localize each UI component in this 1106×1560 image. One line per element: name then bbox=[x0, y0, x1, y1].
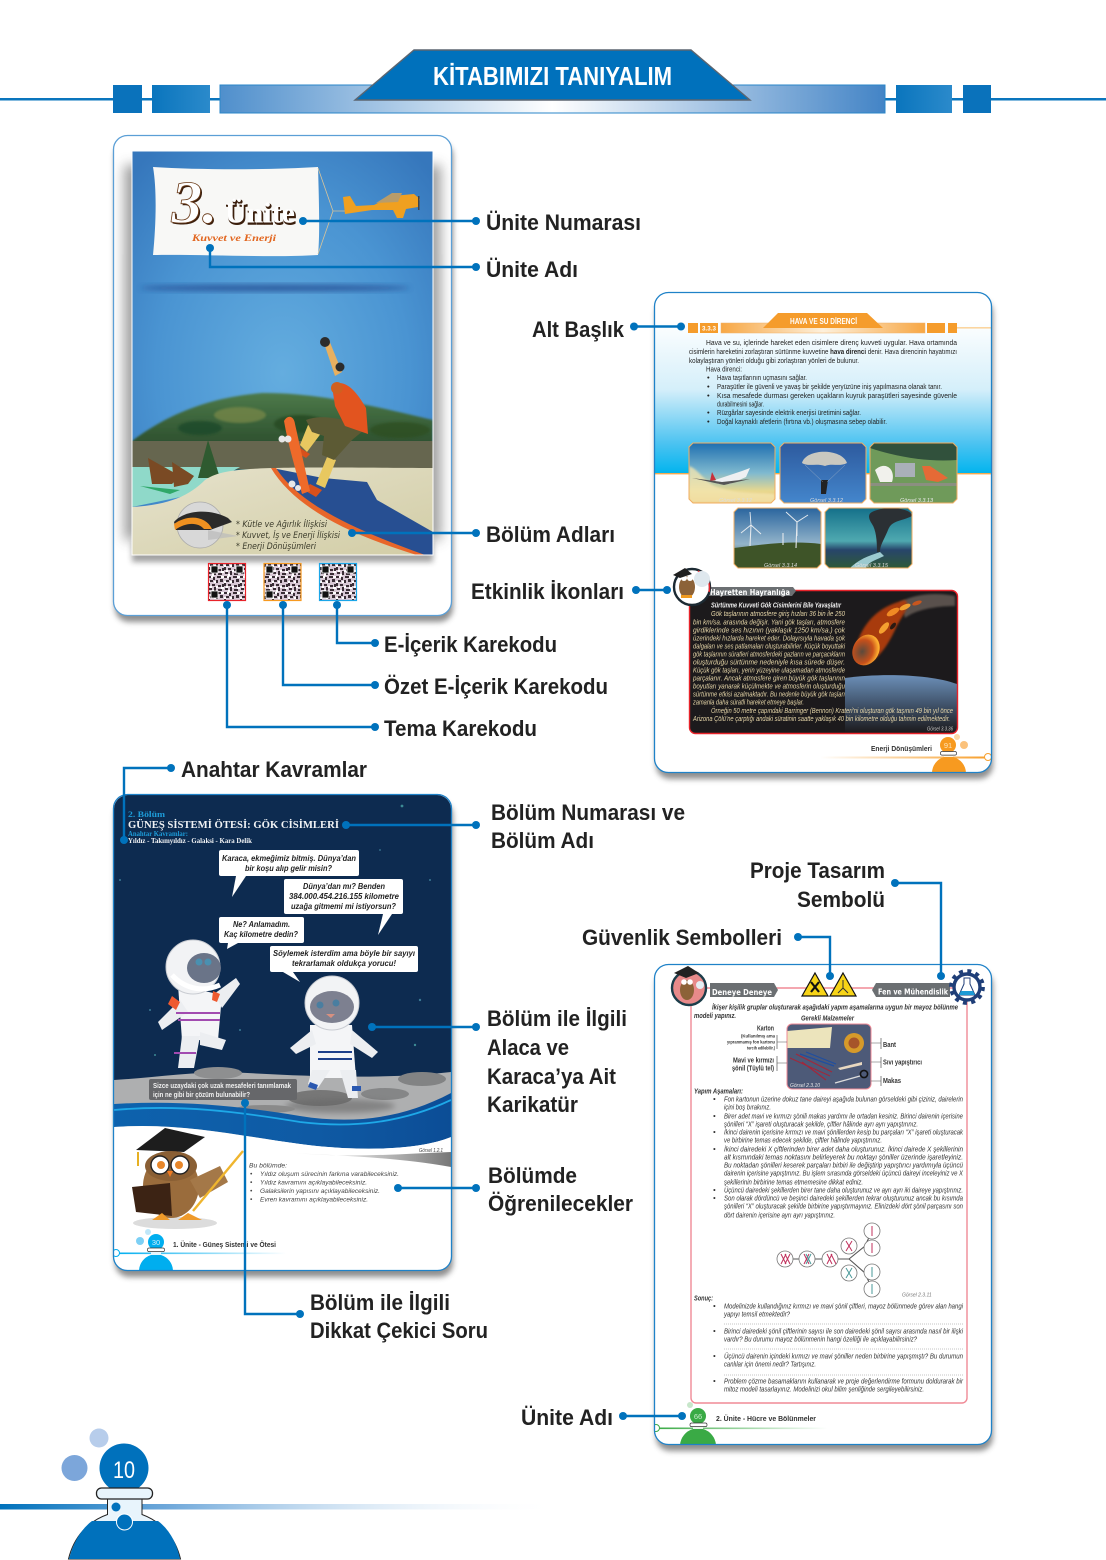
learning outcomes: • bbox=[250, 1180, 253, 1186]
label: Alt Başlık: Alt Başlık bbox=[532, 317, 625, 342]
build steps: Üçüncü dairedeki şekillerden birer tane daha oluşturunuz ve ayrı ayrı iki daireye yapıştırınız. bbox=[724, 1186, 963, 1194]
build steps: içini boş bırakınız. bbox=[724, 1102, 771, 1112]
speech bubble: first line: Karaca, ekmeğimiz bitmiş. Dünya’dan bbox=[222, 854, 356, 863]
build steps: Yapım Aşamaları: bbox=[694, 1086, 743, 1096]
activity box: dark meteor panel: parçalanır. Ancak atmosfere giren büyük gök taşlarının bbox=[692, 673, 845, 682]
build steps: • bbox=[713, 1128, 716, 1136]
footer: unit name and page number bbox=[112, 1229, 286, 1271]
label: Ünite Adı alt: Ünite Adı bbox=[521, 1405, 613, 1430]
connector: Etkinlik İkonları bbox=[632, 586, 671, 594]
chapter heading: 2. Bölüm bbox=[128, 810, 165, 819]
connector: Güvenlik Sembolleri bbox=[794, 933, 834, 980]
activity box: dark meteor panel: Örneğin 50 metre çapındaki Barringer (Bennon) Krateri’ni oluşturan gök taşının 49 bin yıl önce bbox=[711, 706, 953, 715]
label: Bölüm ile İlgili Dikkat Çekici Soru bbox=[310, 1290, 488, 1343]
banner bbox=[153, 167, 350, 256]
label: Bölüm ile İlgili Alaca ve Karaca'ya Ait Karikatür: Karikatür bbox=[487, 1092, 578, 1117]
label: E-İçerik Karekodu: E-İçerik Karekodu bbox=[384, 632, 557, 657]
chapter heading: GÜNEŞ SİSTEMİ ÖTESİ: GÖK CİSİMLERİ bbox=[128, 818, 339, 831]
question box: için ne gibi bir çözüm bulunabilir? bbox=[153, 1090, 250, 1099]
activity box: dark meteor panel: oluşturduğu sürtünme nedeniyle kısa sürede düşer. bbox=[693, 657, 845, 666]
icon: owl badge bbox=[672, 966, 706, 1005]
panel: chapter opener page bbox=[112, 794, 453, 1277]
conclusion questions: canlılar için önemi nedir? Tartışınız. bbox=[724, 1360, 816, 1368]
chapter heading bbox=[128, 810, 339, 845]
activity box: dark meteor panel: bin km/sa. arasında değişir. Yani gök taşları, atmosfere bbox=[693, 617, 845, 626]
label: Etkinlik İkonları: Etkinlik İkonları bbox=[471, 579, 624, 604]
body text: Hava ve su, içlerinde hareket eden cisimlere direnç kuvveti uygular. Hava ortamında bbox=[706, 338, 958, 347]
conclusion questions: Problem çözme basamaklarını kullanarak ve proje değerlendirme formunu doldurarak bir bbox=[724, 1376, 963, 1386]
activity box: dark meteor panel: Arizona Çölü’ne çarptığı andaki süratinin saatte yaklaşık 40 bin kilometre olduğu tahmin edilmektedir. bbox=[692, 714, 950, 723]
build steps: dairenin içerisine yapıştırınız. Bu işlem sırasında görseldeki üçüncü daireyi inceleyiniz ve X bbox=[724, 1168, 964, 1178]
build steps: İkinci dairedeki X çiftlerinden birer adet daha oluşturunuz. İkinci dairede X şekillerinin bbox=[724, 1144, 963, 1154]
label: Bölüm ile İlgili Alaca ve Karaca'ya Ait Karikatür: Karaca’ya Ait bbox=[487, 1064, 617, 1089]
blue wave bbox=[114, 1093, 451, 1149]
conclusion questions: Modelinizde kullandığınız kırmızı ve mavi şönil çiftleri, mayoz bölünmede görev alan hangi bbox=[724, 1302, 963, 1310]
activity box: dark meteor panel: Görsel 3.3.36 bbox=[927, 726, 953, 732]
speech bubble: third line bbox=[219, 917, 304, 949]
qr code: summary bbox=[264, 564, 301, 600]
label: Ünite Adı: Ünite Adı bbox=[486, 257, 578, 282]
build steps: Son olarak dördüncü ve beşinci dairedeki şekillerden tekrar oluşturunuz ancak bu kısımda bbox=[724, 1194, 963, 1202]
activity box: dark meteor panel: boyutları yanarak küçülmekte ve atmosferin oluşturduğu bbox=[693, 681, 846, 690]
conclusion questions: mitoz modeli tasarlayınız. Modelinizi okul bilim şenliğinde sergileyebilirsiniz. bbox=[724, 1384, 924, 1394]
conclusion questions: Sonuç: bbox=[694, 1294, 713, 1302]
body text: Rüzgârlar sayesinde elektrik enerjisi üretimini sağlar. bbox=[717, 408, 861, 417]
body text: cisimlerin hareketini zorlaştıran sürtünme kuvvetine hava direnci denir. Hava direncinin hayatımızı bbox=[689, 347, 957, 356]
connector: Anahtar Kavramlar bbox=[120, 764, 175, 844]
build steps: • bbox=[713, 1144, 716, 1154]
activity box: dark meteor panel: Sürtünme Kuvveti Gök Cisimlerini Bile Yavaşlatır bbox=[711, 600, 842, 610]
banner: Kuvvet ve Enerji bbox=[191, 234, 276, 244]
footer: unit name and page number: 1. Ünite - Güneş Sistemi ve Ötesi bbox=[173, 1240, 276, 1249]
section names: * Kuvvet, İş ve Enerji İlişkisi bbox=[236, 530, 341, 540]
material labels: Makas bbox=[883, 1078, 901, 1085]
label: Güvenlik Sembolleri: Güvenlik Sembolleri bbox=[582, 925, 782, 950]
build steps: şönilleri “X” işareti oluşturacak şekilde, çiftler hâlinde ayrı ayrı yapıştırınız. bbox=[724, 1120, 918, 1128]
speech bubble: second line bbox=[284, 879, 403, 935]
material labels: Bant bbox=[883, 1042, 897, 1049]
footer: unit name and page number: 2. Ünite - Hücre ve Bölünmeler bbox=[716, 1414, 816, 1423]
build steps: şekillerinin birbirine temas etmemesine dikkat ediniz. bbox=[724, 1178, 863, 1186]
photo: airplane bbox=[689, 443, 775, 504]
conclusion questions: yapıyı temsil etmektedir? bbox=[723, 1310, 791, 1318]
speech bubble: second line: 384.000.454.216.155 kilometre bbox=[289, 892, 400, 901]
speech bubble: third line: Kaç kilometre dedin? bbox=[224, 930, 298, 939]
material labels: şönil (Tüylü tel) bbox=[732, 1066, 774, 1072]
speech bubble: first line bbox=[219, 850, 359, 897]
banner: 3. bbox=[170, 170, 218, 236]
body text: • bbox=[707, 391, 710, 400]
conclusion questions: • bbox=[713, 1352, 716, 1360]
material labels: yıpranmamış fon kartonu bbox=[727, 1040, 775, 1046]
icon: project design gear bbox=[951, 971, 983, 1003]
conclusion questions: Birinci dairedeki şönil çiftlerinin sayısı ile son dairedeki şönil sayısı arasında nasıl bir ilişki bbox=[724, 1326, 963, 1336]
question box bbox=[149, 1079, 297, 1100]
orange sub heading: 3.3.3 bbox=[702, 326, 717, 332]
body text: kolaylaştıran yönleri olduğu gibi zorlaştıran yönleri de bulunur. bbox=[689, 356, 859, 365]
label: Bölüm Numarası ve Bölüm Adı: Bölüm Numarası ve bbox=[491, 800, 685, 825]
speech bubble: third line: Ne? Anlamadım. bbox=[233, 920, 290, 929]
label: Bölüm ile İlgili Alaca ve Karaca'ya Ait Karikatür bbox=[487, 1006, 627, 1117]
learning outcomes: Evren kavramını açıklayabileceksiniz. bbox=[260, 1196, 368, 1204]
banner: Ünite bbox=[226, 200, 296, 231]
build steps: Birer adet mavi ve kırmızı şönili makas yardımı ile ortadan kesiniz. Birinci dairenin içerisine bbox=[724, 1112, 963, 1120]
activity box: dark meteor panel: dalgaları ve ses patlamaları oluşturabilirler. Küçük boyuttaki bbox=[693, 641, 845, 650]
connector: Bölüm Adları bbox=[348, 529, 480, 537]
build steps: • bbox=[713, 1094, 716, 1104]
speech bubble: first line: bir koşu alıp gelir misin? bbox=[245, 864, 332, 873]
label: Ünite Numarası: Ünite Numarası bbox=[486, 210, 641, 235]
footer: chapter name and page number bbox=[820, 734, 992, 773]
tab: Fen ve Mühendislik bbox=[872, 983, 950, 997]
photo: jet: Görsel 3.3.13 bbox=[900, 498, 934, 504]
build steps bbox=[694, 1086, 964, 1220]
label: Bölüm Adları: Bölüm Adları bbox=[486, 522, 615, 547]
connector: Ünite Numarası bbox=[299, 217, 480, 225]
photo: tornado bbox=[825, 508, 912, 569]
activity box: dark meteor panel: Küçük gök taşları, yerin yüzeyine ulaşamadan atmosferde bbox=[693, 665, 845, 674]
activity box: dark meteor panel: üzerindeki hızlarda hareket eder. Dolayısıyla havada şok bbox=[693, 633, 846, 642]
materials photo: Görsel 2.3.10 bbox=[790, 1083, 820, 1089]
cover image bbox=[132, 151, 433, 556]
instructions: modeli yapınız. bbox=[694, 1011, 736, 1020]
learning outcomes bbox=[249, 1148, 443, 1204]
learning outcomes: Galaksilerin yapısını açıklayabileceksiniz. bbox=[260, 1188, 380, 1195]
photo: jet bbox=[870, 443, 957, 504]
photo: parachute: Görsel 3.3.12 bbox=[810, 498, 843, 504]
body text: Paraşütler ile güvenli ve yavaş bir şekilde yeryüzüne iniş yapılmasına olanak tanır. bbox=[717, 382, 942, 391]
build steps: ve birbirine temas edecek şekilde, çiftler hâlinde yapıştırınız. bbox=[724, 1136, 882, 1144]
label: Proje Tasarım Sembolü: Proje Tasarım bbox=[750, 858, 885, 883]
owl illustration bbox=[132, 1128, 243, 1229]
footer: unit name and page number: 30 bbox=[152, 1238, 160, 1247]
question box: Sizce uzaydaki çok uzak mesafeleri tanımlamak bbox=[153, 1081, 291, 1090]
label: Bölümde Öğrenilecekler bbox=[488, 1163, 633, 1216]
material labels: Mavi ve kırmızı bbox=[733, 1058, 774, 1064]
conclusion questions: • bbox=[713, 1326, 716, 1336]
activity box: dark meteor panel: sürtünme etkisi azalmaktadır. Bu nedenle büyük gök taşları bbox=[693, 689, 845, 698]
build steps: Bu noktadan şönilleri keserek parçaları birbiri ile değiştirip yapıştırıcı yardımıyla üçüncü bbox=[724, 1160, 964, 1170]
speech bubble: fourth line: tekrarlamak oldukça yorucu! bbox=[292, 959, 396, 968]
orange sub heading bbox=[688, 313, 957, 333]
header banner bbox=[0, 50, 1106, 113]
banner: 3. bbox=[172, 171, 219, 237]
section names: * Kütle ve Ağırlık İlişkisi bbox=[236, 519, 328, 529]
banner: Ünite bbox=[225, 198, 295, 230]
build steps: • bbox=[713, 1112, 716, 1120]
instructions: İkişer kişilik gruplar oluşturarak aşağıdaki yapım aşamalarına uygun bir mayoz bölünme bbox=[712, 1002, 959, 1012]
panel: experiment page bbox=[652, 964, 993, 1451]
tab: Deneye Deneye bbox=[710, 983, 778, 997]
label: Bölüm ile İlgili Dikkat Çekici Soru: Dikkat Çekici Soru bbox=[310, 1318, 488, 1343]
meiosis diagram: Görsel 2.3.11 bbox=[902, 1292, 932, 1298]
instructions: Gerekli Malzemeler bbox=[801, 1014, 855, 1022]
footer: unit name and page number bbox=[652, 1402, 827, 1445]
label: Bölüm ile İlgili Alaca ve Karaca'ya Ait Karikatür: Bölüm ile İlgili bbox=[487, 1006, 627, 1031]
connector: Proje Tasarım Sembolü bbox=[891, 879, 945, 980]
photo: tornado: Görsel 3.3.15 bbox=[855, 563, 889, 569]
moon surface bbox=[114, 1072, 451, 1140]
learning outcomes: • bbox=[250, 1171, 253, 1178]
label: Bölüm Numarası ve Bölüm Adı: Bölüm Adı bbox=[491, 828, 594, 853]
learning outcomes: Yıldız kavramını açıklayabileceksiniz. bbox=[260, 1180, 367, 1186]
icon: owl badge bbox=[673, 568, 710, 605]
connector: Alt Başlık bbox=[630, 322, 685, 330]
connector: karikatür bbox=[368, 1023, 480, 1031]
qr code: theme bbox=[208, 564, 246, 600]
connector: Tema Karekodu bbox=[223, 601, 379, 731]
label: Proje Tasarım Sembolü bbox=[750, 858, 885, 912]
learning outcomes: • bbox=[250, 1196, 253, 1204]
label: Bölüm ile İlgili Dikkat Çekici Soru: Bölüm ile İlgili bbox=[310, 1290, 450, 1315]
material labels: Karton bbox=[757, 1026, 774, 1032]
page number flask: 10 bbox=[113, 1457, 135, 1484]
build steps: dört dairenin içerisine ayrı ayrı yapıştırınız. bbox=[724, 1210, 835, 1220]
photo: wind turbines bbox=[734, 508, 821, 569]
learning outcomes: • bbox=[250, 1188, 253, 1195]
label: Anahtar Kavramlar: Anahtar Kavramlar bbox=[181, 757, 367, 782]
materials photo bbox=[787, 1024, 871, 1089]
tab: Fen ve Mühendislik: Fen ve Mühendislik bbox=[878, 988, 949, 996]
activity box: dark meteor panel: zamanla daha süratli hareket etmeye başlar. bbox=[692, 697, 804, 706]
footer: chapter name and page number: 91 bbox=[944, 741, 952, 750]
build steps: İkinci dairenin içerisine kırmızı ve mavi şönillerden kesip bu parçaları “X” işareti oluşturacak bbox=[724, 1128, 964, 1136]
body text: • bbox=[707, 382, 710, 391]
connector: Bölüm Numarası ve Bölüm Adı bbox=[342, 821, 480, 829]
build steps: Fon kartonun üzerine dokuz tane daireyi aşağıda bulunan görseldeki gibi çiziniz, dairelerin bbox=[724, 1094, 963, 1104]
activity box: dark meteor panel: girdiklerinde ses hızının (yaklaşık 1250 km/sa.) çok bbox=[693, 625, 846, 634]
speech bubble: second line: Dünya’dan mı? Benden bbox=[303, 882, 385, 891]
body text: Hava direnci: bbox=[706, 364, 742, 374]
panel: subject page bbox=[654, 292, 993, 779]
label: Bölüm ile İlgili Alaca ve Karaca'ya Ait Karikatür: Alaca ve bbox=[487, 1035, 569, 1060]
footer: chapter name and page number: Enerji Dönüşümleri bbox=[871, 744, 932, 753]
conclusion questions: • bbox=[713, 1302, 716, 1310]
body text: Doğal kaynaklı afetlerin (fırtına vb.) oluşmasına sebep olabilir. bbox=[717, 417, 887, 426]
label: Bölüm Numarası ve Bölüm Adı bbox=[491, 800, 685, 853]
body text: Hava taşıtlarının uçmasını sağlar. bbox=[717, 373, 807, 382]
connector: Ünite Adı bbox=[206, 244, 480, 271]
speech bubble: fourth line: Söylemek isterdim ama böyle bir sayıyı bbox=[273, 949, 415, 958]
body text bbox=[689, 338, 958, 426]
label: Bölümde Öğrenilecekler: Öğrenilecekler bbox=[488, 1191, 633, 1216]
chapter heading: Anahtar Kavramlar: bbox=[128, 831, 188, 838]
activity box: dark meteor panel: gök taşlarının süratleri atmosferdeki gazların ve parçacıkların bbox=[693, 649, 845, 658]
label: Tema Karekodu: Tema Karekodu bbox=[384, 716, 537, 741]
build steps: alt kısmındaki temas noktasını belirleyerek bu noktayı şöniller üzerinde işaretleyiniz. bbox=[724, 1152, 963, 1162]
learning outcomes: Görsel 1.2.1 bbox=[419, 1148, 443, 1154]
body text: Kısa mesafede durması gereken uçakların kuyruk paraşütleri sayesinde güvenle bbox=[717, 391, 957, 400]
speech bubble: fourth line bbox=[270, 946, 418, 982]
learning outcomes: Yıldız oluşum sürecinin farkına varabileceksiniz. bbox=[260, 1171, 399, 1178]
photo: parachute bbox=[780, 443, 866, 504]
tab: Deneye Deneye: Deneye Deneye bbox=[712, 988, 772, 997]
activity box: dark meteor panel bbox=[690, 590, 958, 734]
label: Bölümde Öğrenilecekler: Bölümde bbox=[488, 1163, 577, 1188]
conclusion questions: vardır? Bu durumu mayoz bölünmenin hangi özelliği ile açıklayabilirsiniz? bbox=[724, 1334, 918, 1344]
material labels: tercih edilebilir.) bbox=[747, 1046, 775, 1052]
body text: • bbox=[707, 408, 710, 417]
learning outcomes: Bu bölümde: bbox=[249, 1162, 287, 1170]
icon: safety symbols bbox=[802, 973, 856, 996]
photo: airplane: Görsel 3.3.12 bbox=[719, 498, 752, 504]
material labels: (Kullanılmış ama bbox=[741, 1034, 775, 1040]
material labels bbox=[727, 1026, 922, 1086]
conclusion questions bbox=[694, 1294, 963, 1394]
activity tab: Hayretten Hayranlığa bbox=[710, 588, 790, 597]
label: Proje Tasarım Sembolü: Sembolü bbox=[797, 887, 885, 912]
astronaut: Karaca bbox=[158, 940, 240, 1068]
connector: Dikkat Çekici Soru bbox=[241, 1099, 304, 1318]
body text: • bbox=[707, 373, 710, 382]
activity box: dark meteor panel: Gök taşlarının atmosfere giriş hızları 36 bin ile 250 bbox=[711, 609, 846, 618]
title: KİTABIMIZI TANIYALIM bbox=[433, 61, 672, 91]
build steps: • bbox=[713, 1186, 716, 1194]
build steps: şönilleri “X” oluşturacak şekilde birbirine yapıştırmayınız. Elinizdeki dört şönil parçasını son bbox=[724, 1202, 963, 1210]
speech bubble: second line: uzağa gitmemi mi istiyorsun? bbox=[291, 902, 396, 911]
qr code: e-content bbox=[320, 564, 356, 600]
astronaut: Alaca bbox=[290, 976, 378, 1098]
section names: * Enerji Dönüşümleri bbox=[236, 541, 317, 551]
connector: Özet E-İçerik Karekodu bbox=[279, 601, 379, 689]
photo: wind turbines: Görsel 3.3.14 bbox=[764, 563, 797, 569]
airplane bbox=[343, 193, 420, 218]
connector: Bölümde Öğrenilecekler bbox=[394, 1184, 480, 1192]
body text: durabilmesini sağlar. bbox=[717, 400, 764, 408]
conclusion questions: • bbox=[713, 1376, 716, 1386]
train badge bbox=[174, 502, 238, 548]
section names bbox=[236, 519, 341, 551]
pink frame bbox=[691, 988, 967, 1403]
label: Özet E-İçerik Karekodu: Özet E-İçerik Karekodu bbox=[384, 674, 608, 699]
chapter heading: Yıldız - Takımyıldız - Galaksi - Kara Delik bbox=[128, 838, 252, 845]
panel: unit cover page bbox=[114, 136, 453, 622]
orange sub heading: HAVA VE SU DİRENCİ bbox=[790, 317, 857, 326]
material labels: Sıvı yapıştırıcı bbox=[883, 1060, 922, 1066]
instructions bbox=[694, 1002, 959, 1022]
build steps: • bbox=[713, 1194, 716, 1202]
meiosis diagram bbox=[777, 1223, 932, 1298]
footer: unit name and page number: 66 bbox=[694, 1412, 702, 1421]
connector: E-İçerik Karekodu bbox=[333, 601, 379, 647]
page number flask bbox=[0, 1428, 560, 1559]
skater bbox=[278, 337, 368, 497]
body text: • bbox=[707, 417, 710, 426]
conclusion questions: Üçüncü dairenin içindeki kırmızı ve mavi şöniller neden birbirine yapışmıştı? Bu durumun bbox=[724, 1352, 963, 1360]
connector: Ünite Adı alt bbox=[619, 1412, 686, 1420]
